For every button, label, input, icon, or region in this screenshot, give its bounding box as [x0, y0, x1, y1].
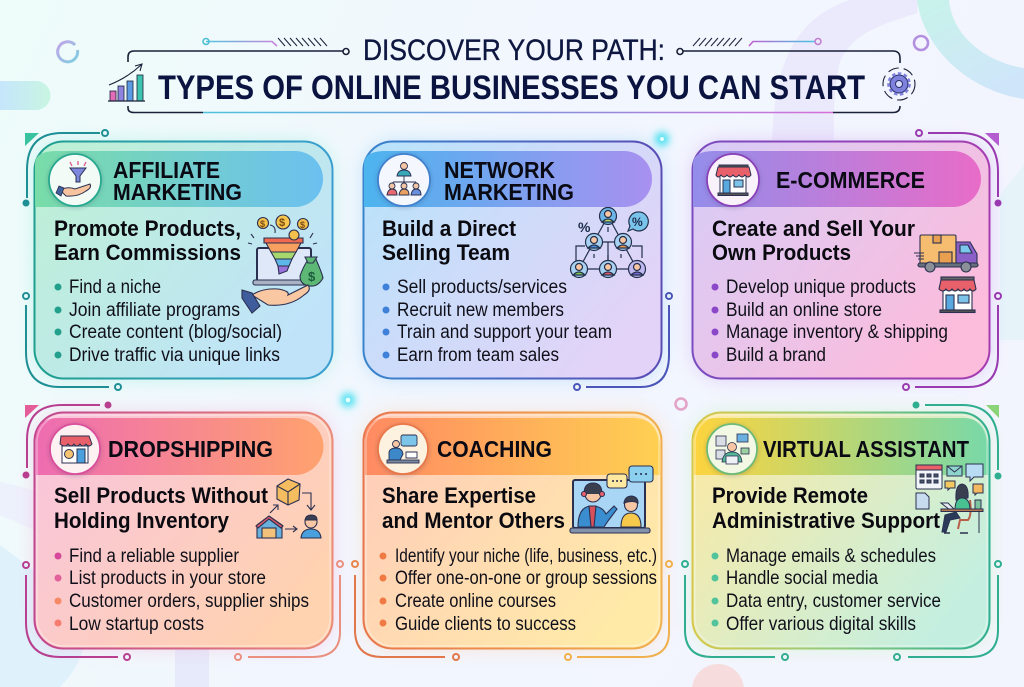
bullet list: Identify your niche (life, business, etc.) — [395, 546, 657, 567]
subheading: and Mentor Others — [382, 508, 565, 533]
subheading: Administrative Support — [712, 508, 940, 533]
bullet list — [712, 277, 948, 366]
subheading: Own Products — [712, 240, 851, 265]
title: TYPES OF ONLINE BUSINESSES YOU CAN START — [158, 69, 865, 107]
inner highlight — [37, 415, 330, 646]
header band — [35, 151, 323, 207]
bullet list: Data entry, customer service — [726, 591, 941, 612]
subheading: Build a Direct — [382, 216, 516, 241]
subheading — [712, 216, 915, 265]
title — [158, 34, 865, 107]
heading — [444, 157, 574, 205]
subheading: Promote Products, — [54, 216, 241, 241]
glow dot top — [655, 132, 669, 146]
bullet list — [380, 546, 657, 635]
icon: shop — [939, 277, 976, 312]
icon: funnel, coins and hand: $ — [308, 269, 316, 284]
subheading — [382, 216, 516, 265]
heading: MARKETING — [444, 179, 574, 205]
bullet list: Create online courses — [395, 591, 556, 612]
bullet list: Guide clients to success — [395, 614, 576, 635]
bullet list: Low startup costs — [69, 614, 204, 635]
icon: gear — [883, 68, 915, 100]
bullet list: Offer various digital skills — [726, 614, 916, 635]
heading: COACHING — [437, 436, 552, 462]
frame accents — [23, 130, 121, 390]
bullet list: Offer one-on-one or group sessions — [395, 568, 657, 589]
heading: AFFILIATE — [113, 157, 220, 183]
subheading — [54, 483, 268, 533]
subheading: Share Expertise — [382, 483, 536, 508]
heading — [113, 157, 242, 205]
bullet list: Create content (blog/social) — [69, 322, 282, 343]
icon badge — [707, 424, 757, 474]
bullet list — [712, 546, 941, 635]
bullet list: Drive traffic via unique links — [69, 345, 280, 366]
card body — [364, 142, 662, 378]
bullet list: Find a niche — [69, 277, 161, 298]
subheading: Holding Inventory — [54, 508, 229, 533]
subheading — [54, 216, 241, 265]
icon: funnel, coins and hand: $ — [279, 217, 285, 229]
icon: funnel, coins and hand — [242, 215, 323, 313]
icon: growth chart — [108, 64, 145, 101]
bullet list: Train and support your team — [397, 322, 612, 343]
bullet list: Build an online store — [726, 300, 882, 321]
bullet list: Recruit new members — [397, 300, 564, 321]
icon badge — [378, 154, 430, 206]
decorative ring left — [58, 42, 78, 62]
icon: team pyramid: % — [578, 219, 591, 235]
bullet list: Manage emails & schedules — [726, 546, 936, 567]
bullet list: Develop unique products — [726, 277, 916, 298]
card body — [364, 412, 662, 648]
bullet list — [54, 277, 282, 366]
panel: virtual assistant — [682, 402, 1001, 660]
icon badge — [50, 424, 100, 474]
panel: affiliate marketing — [23, 130, 333, 390]
subheading: Selling Team — [382, 240, 510, 265]
card body — [34, 142, 332, 378]
title: DISCOVER YOUR PATH: — [363, 34, 665, 67]
header band — [694, 418, 988, 475]
inner highlight — [695, 415, 987, 646]
bullet list: Sell products/services — [397, 277, 567, 298]
subheading — [382, 483, 565, 533]
subheading: Sell Products Without — [54, 483, 268, 508]
title frame — [128, 38, 900, 112]
heading: VIRTUAL ASSISTANT — [763, 436, 969, 462]
subheading: Provide Remote — [712, 483, 868, 508]
panel: dropshipping — [23, 402, 343, 660]
subheading: Earn Commissions — [54, 240, 241, 265]
header band — [365, 418, 660, 475]
header band — [364, 151, 652, 207]
frame accents — [682, 402, 1001, 660]
bullet list: Handle social media — [726, 568, 878, 589]
heading: DROPSHIPPING — [108, 436, 273, 462]
frame accents left — [23, 402, 130, 660]
icon: funnel, coins and hand: $ — [260, 219, 265, 229]
bullet list: Find a reliable supplier — [69, 546, 240, 567]
icon: online coaching laptop — [570, 466, 653, 533]
icon: dropship flow — [256, 479, 321, 538]
decorative left pill — [0, 81, 50, 110]
icon: delivery truck — [914, 235, 978, 272]
bullet list: Customer orders, supplier ships — [69, 591, 309, 612]
glow dot middle — [341, 393, 355, 407]
icon: team pyramid: % — [632, 215, 643, 229]
card body — [34, 412, 332, 648]
header band — [693, 151, 981, 207]
inner highlight — [366, 415, 659, 646]
decorative ring middle — [676, 398, 686, 410]
bullet list: Join affiliate programs — [69, 300, 240, 321]
panel: network marketing — [363, 141, 672, 390]
card body — [692, 142, 990, 378]
icon: team pyramid — [570, 208, 648, 278]
bullet list: Manage inventory & shipping — [726, 322, 948, 343]
bullet list — [54, 546, 309, 635]
decorative ring right — [914, 36, 928, 50]
icon badge — [49, 154, 101, 206]
panel: coaching — [352, 412, 672, 660]
card body — [692, 412, 990, 648]
icon: virtual assistant at desk — [916, 464, 983, 533]
bullet list: Earn from team sales — [397, 345, 559, 366]
bullet list: List products in your store — [69, 568, 266, 589]
icon badge — [707, 154, 759, 206]
bullet list — [382, 277, 612, 366]
subheading: Create and Sell Your — [712, 216, 915, 241]
icon badge — [378, 424, 428, 474]
icon: funnel, coins and hand: $ — [300, 220, 305, 230]
header band — [36, 418, 323, 475]
frame accents — [352, 561, 672, 660]
panel: e-commerce — [692, 130, 1001, 390]
heading: NETWORK — [444, 157, 555, 183]
frame accents right — [235, 561, 343, 660]
bullet list: Build a brand — [726, 345, 826, 366]
frame accents — [903, 130, 1001, 390]
heading: MARKETING — [113, 179, 242, 205]
subheading — [712, 483, 940, 533]
heading: E-COMMERCE — [776, 167, 925, 193]
frame accents — [574, 293, 672, 390]
